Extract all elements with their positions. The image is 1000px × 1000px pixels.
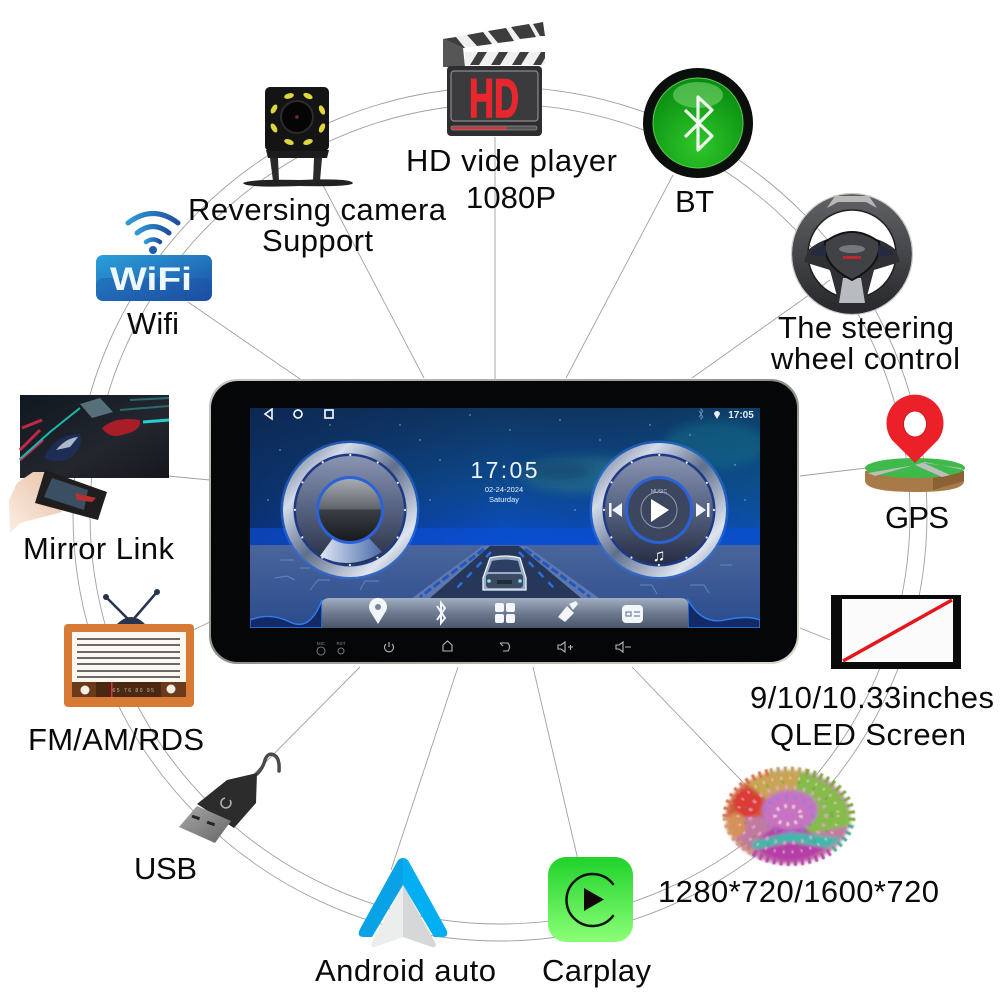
icon: screen size diagonal bbox=[831, 595, 961, 669]
clock: Saturday bbox=[489, 495, 519, 504]
floor circuit marks bbox=[275, 560, 732, 594]
icon: usb plug bbox=[179, 754, 279, 843]
label: android auto: Android auto bbox=[315, 953, 496, 988]
stars bbox=[267, 414, 746, 511]
status bar: 17:05 bbox=[728, 410, 754, 421]
dial right music bbox=[590, 440, 728, 580]
dial right music: MUSIC bbox=[651, 489, 667, 495]
icon: android auto bbox=[359, 858, 447, 947]
status bar bbox=[265, 409, 754, 421]
icon: clapperboard HD bbox=[443, 22, 545, 136]
label: screen size bbox=[750, 680, 994, 752]
icon: GPS pin bbox=[865, 395, 965, 492]
dial left bbox=[280, 440, 420, 580]
icon: carplay bbox=[548, 857, 633, 942]
label: steering wheel control bbox=[770, 310, 960, 376]
icon: mirror link bbox=[9, 395, 169, 533]
hardware buttons: RST bbox=[336, 641, 346, 646]
nebula bbox=[520, 454, 616, 496]
hardware buttons: MIC bbox=[317, 641, 326, 646]
label: reversing camera: Support bbox=[262, 223, 373, 258]
icon: steering wheel bbox=[792, 194, 912, 314]
clock: 17:05 bbox=[470, 457, 538, 483]
icon: color blob resolution bbox=[726, 770, 852, 864]
icon: retro radio: 65 76 80 95 bbox=[113, 688, 155, 694]
icon: retro radio bbox=[64, 589, 194, 707]
label: HD video player bbox=[406, 143, 617, 215]
label: GPS: GPS bbox=[885, 500, 949, 535]
label: mirror link: Mirror Link bbox=[23, 531, 174, 566]
icon: wifi bbox=[96, 214, 212, 301]
label: carplay: Carplay bbox=[542, 953, 652, 988]
label: reversing camera bbox=[188, 192, 447, 258]
label: screen size: QLED Screen bbox=[770, 717, 966, 752]
dock waves bbox=[250, 600, 760, 628]
dock icons bbox=[369, 598, 643, 624]
road bbox=[412, 546, 599, 598]
device bezel bbox=[209, 379, 799, 664]
label: wifi: Wifi bbox=[127, 306, 179, 341]
car bbox=[483, 556, 526, 590]
clock bbox=[472, 462, 537, 504]
icon: bluetooth bbox=[643, 68, 753, 178]
label: reversing camera: Reversing camera bbox=[188, 192, 447, 227]
label: resolution: 1280*720/1600*720 bbox=[658, 874, 939, 909]
icon: clapperboard HD: HD bbox=[469, 67, 519, 129]
main head unit bbox=[209, 379, 799, 664]
app dock bbox=[322, 598, 688, 628]
clock: 02-24-2024 bbox=[485, 485, 523, 494]
icon: wifi: WiFi bbox=[110, 261, 192, 297]
label: HD video player: 1080P bbox=[466, 180, 556, 215]
dial right music: ♫ bbox=[653, 546, 665, 565]
label: HD video player: HD vide player bbox=[406, 143, 617, 178]
icon: reversing camera bbox=[243, 87, 353, 187]
label: FM/AM/RDS: FM/AM/RDS bbox=[28, 722, 204, 757]
label: steering wheel control: wheel control bbox=[770, 341, 960, 376]
label: USB: USB bbox=[134, 851, 197, 886]
horizon glow bbox=[250, 528, 760, 545]
label: BT: BT bbox=[675, 184, 714, 219]
feathered texture bbox=[726, 770, 852, 862]
hardware buttons bbox=[317, 641, 631, 655]
display screen bbox=[250, 408, 765, 628]
connector circles and spokes bbox=[73, 87, 927, 941]
label: steering wheel control: The steering bbox=[778, 310, 954, 345]
label: screen size: 9/10/10.33inches bbox=[750, 680, 994, 715]
